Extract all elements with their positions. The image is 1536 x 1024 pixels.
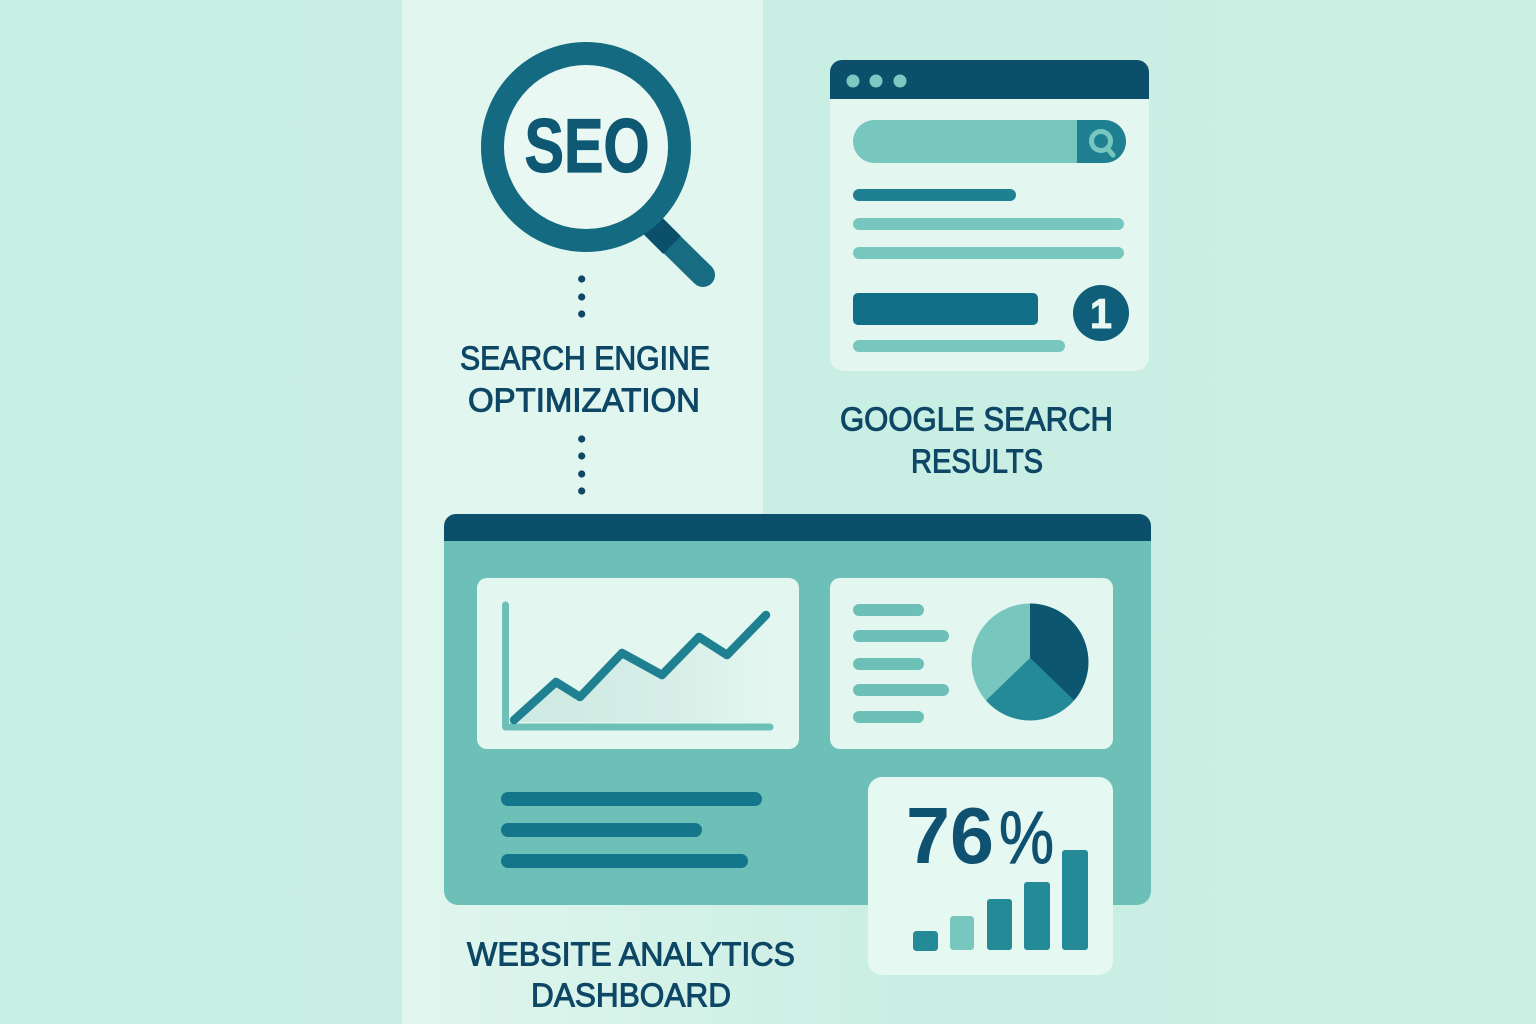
stat value: 76	[906, 791, 994, 880]
trend line	[514, 615, 766, 720]
dashboard body	[444, 514, 1151, 905]
search bar	[853, 120, 1126, 163]
panel: Google search results browser window	[830, 60, 1149, 371]
legend lines	[853, 604, 949, 723]
result title line	[853, 189, 1016, 201]
result text lines	[853, 218, 1124, 259]
dotted connector: magnifier to label	[578, 275, 585, 318]
stat value	[906, 791, 1054, 880]
label: Search Engine Optimization	[460, 340, 710, 418]
panel: 76% stat card	[868, 777, 1113, 975]
chart area fill	[514, 615, 772, 722]
label: Google Search Results	[840, 400, 1113, 480]
label: Website Analytics Dashboard	[467, 936, 795, 1014]
bar chart	[913, 850, 1088, 951]
top result subline	[853, 340, 1065, 352]
label: Website Analytics Dashboard: DASHBOARD	[531, 976, 731, 1014]
browser body	[830, 60, 1149, 371]
dashboard header bar	[444, 514, 1151, 541]
summary text lines	[501, 792, 762, 868]
magnifier handle	[648, 221, 703, 275]
label: Search Engine Optimization: OPTIMIZATION	[468, 382, 700, 418]
chart axes	[506, 605, 770, 727]
top result block	[853, 293, 1038, 325]
browser title bar	[830, 60, 1149, 99]
icon: SEO magnifying glass	[492, 54, 703, 275]
panel: website analytics dashboard	[444, 514, 1151, 905]
rank 1 badge	[1073, 285, 1129, 341]
SEO text: SEO	[524, 104, 650, 189]
label: Google Search Results: RESULTS	[911, 442, 1043, 480]
label: Search Engine Optimization: SEARCH ENGINE	[460, 340, 710, 376]
rank 1 badge: 1	[1090, 290, 1112, 337]
label: Google Search Results: GOOGLE SEARCH	[840, 400, 1113, 438]
pie chart	[972, 604, 1088, 720]
magnifier lens ring	[492, 54, 680, 240]
vertical light strip	[402, 0, 1102, 1024]
dotted connector: label to dashboard	[578, 435, 585, 495]
window dots	[846, 74, 906, 88]
panel: pie chart and legend	[830, 578, 1113, 749]
panel: line chart	[477, 578, 799, 749]
stat value: %	[999, 796, 1054, 879]
label: Website Analytics Dashboard: WEBSITE ANALYTICS	[467, 936, 795, 972]
